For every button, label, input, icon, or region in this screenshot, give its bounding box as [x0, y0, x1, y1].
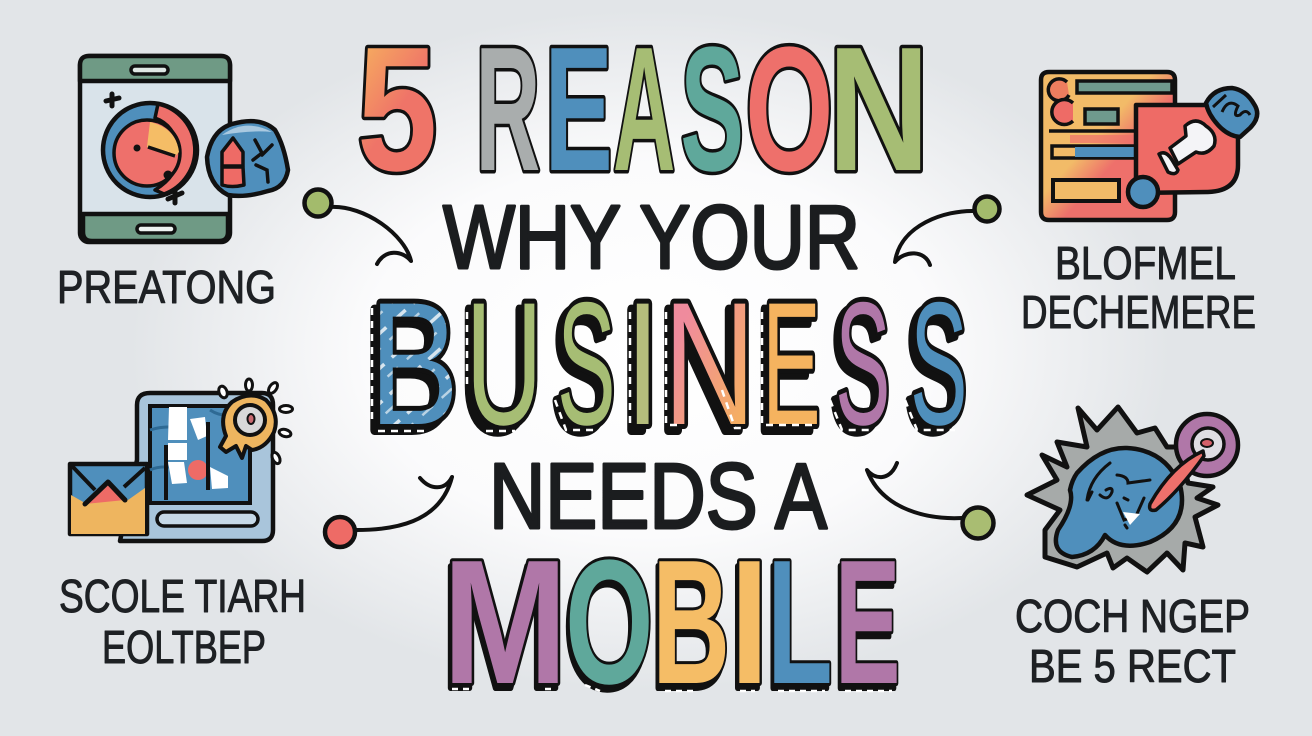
icon: spiky badge with character — [1027, 407, 1238, 572]
title line: BUSINESS: E — [762, 267, 821, 462]
title line: WHY YOUR: WHY YOUR — [443, 188, 860, 288]
label: PREATONG: PREATONG — [57, 261, 276, 313]
connector arrow: top left — [304, 190, 411, 264]
label: BLOFMEL DECHEMERE — [1021, 237, 1256, 338]
label: COCH NGEP BE 5 RECT: BE 5 RECT — [1029, 640, 1236, 692]
title line: MOBILE: M — [442, 523, 568, 721]
title line: 5 REASON: E — [544, 10, 613, 208]
title line: MOBILE — [442, 523, 900, 721]
title line: 5 REASON: O — [745, 10, 834, 208]
title line: 5 REASON: N — [828, 10, 930, 208]
title line: 5 REASON: A — [613, 10, 675, 208]
title line: BUSINESS: N — [663, 267, 756, 462]
icon: tablet with gauge — [80, 56, 288, 242]
label: SCOLE TIARH EOLTBEP: SCOLE TIARH — [59, 570, 306, 622]
connector arrow: bottom left — [325, 477, 452, 547]
title line: MOBILE: I — [730, 523, 769, 721]
title line: 5 REASON: R — [475, 10, 540, 208]
title line: BUSINESS: S — [557, 267, 616, 462]
title line: BUSINESS: U — [466, 267, 543, 462]
title line: NEEDS A: NEEDS A — [489, 444, 827, 548]
label: COCH NGEP BE 5 RECT — [1015, 590, 1250, 692]
label: SCOLE TIARH EOLTBEP: EOLTBEP — [102, 621, 266, 673]
connector arrow: bottom right — [867, 463, 994, 538]
title line: 5 REASON: 5 — [357, 10, 437, 208]
title line: 5 REASON — [357, 10, 930, 208]
title line: MOBILE: E — [835, 523, 900, 721]
title line: MOBILE: O — [565, 523, 654, 721]
title line: BUSINESS — [369, 267, 968, 462]
title line: 5 REASON: S — [680, 10, 744, 208]
title line: MOBILE: L — [767, 523, 833, 721]
label: COCH NGEP BE 5 RECT: COCH NGEP — [1015, 590, 1250, 642]
icon: device with envelope and gear — [70, 379, 292, 541]
label: BLOFMEL DECHEMERE: DECHEMERE — [1021, 286, 1256, 338]
title line: BUSINESS: B — [369, 267, 459, 462]
title line: MOBILE: B — [652, 523, 730, 721]
title line: BUSINESS: S — [835, 267, 890, 462]
infographic canvas: S — [910, 267, 968, 462]
connector arrow: top right — [895, 196, 1000, 265]
title line: BUSINESS: I — [625, 267, 660, 462]
label: SCOLE TIARH EOLTBEP — [59, 570, 306, 673]
label: BLOFMEL DECHEMERE: BLOFMEL — [1055, 237, 1236, 289]
icon: document with card — [1041, 72, 1257, 220]
